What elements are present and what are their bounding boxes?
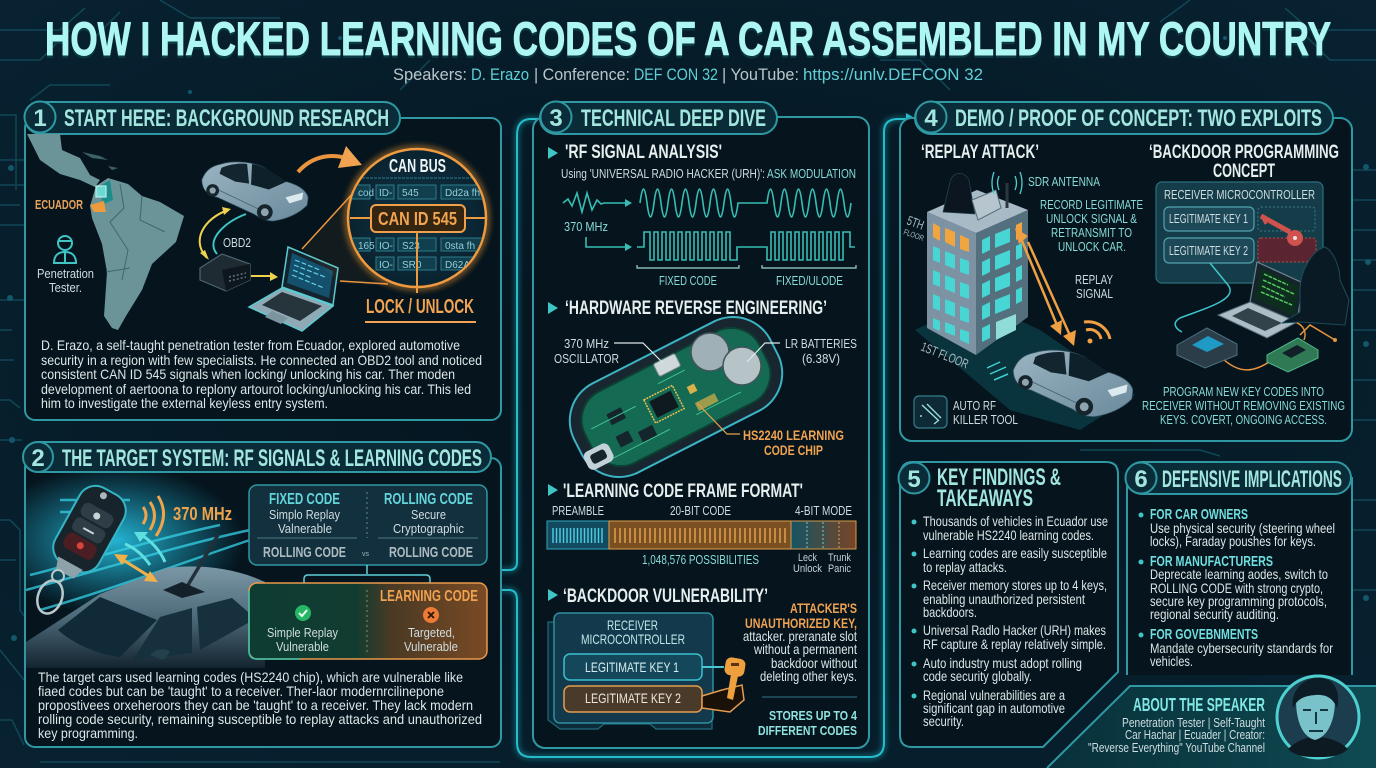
hooded attacker on roof with antenna — [943, 172, 1022, 220]
laptop with terminal — [1218, 262, 1303, 338]
attacker note — [743, 600, 858, 738]
bracket connector — [304, 565, 430, 583]
signal labels: 370 MHz — [564, 219, 608, 234]
cone edge and orange arrow — [298, 146, 388, 284]
replay signal label: REPLAY — [1075, 272, 1113, 287]
magnifier connector cone — [303, 172, 440, 290]
heading 4 — [915, 102, 1333, 134]
receiver diagram in panel 4: LEGITIMATE KEY 2 — [1169, 243, 1248, 258]
receiver diagram in panel 4: LEGITIMATE KEY 1 — [1169, 211, 1248, 226]
record note — [1040, 197, 1143, 254]
hardware reverse engineering heading: ‘HARDWARE REVERSE ENGINEERING’ — [565, 298, 827, 319]
bullet list: Thousands of vehicles in Ecuador use — [923, 513, 1108, 529]
attacker note: UNAUTHORIZED KEY, — [745, 615, 857, 631]
for manufacturers: FOR MANUFACTURERS — [1150, 553, 1273, 570]
bullet list: Auto industry must adopt rolling — [923, 655, 1082, 671]
comparison: learning code: Targeted, — [408, 625, 455, 640]
RF signal analysis heading: 'RF SIGNAL ANALYSIS' — [565, 142, 722, 163]
magnifier: CAN bus detail: D62A — [445, 260, 470, 271]
frame format bar: Trunk — [828, 552, 851, 564]
signal waveform chart — [563, 189, 856, 268]
green circuit device — [1267, 338, 1318, 372]
receiver microcontroller diagram: LEGITIMATE KEY 2 — [585, 690, 681, 706]
comparison: fixed vs rolling code: Cryptographic — [393, 521, 464, 536]
frame format bar: PREAMBLE — [552, 503, 604, 518]
frame format bar: 4-BIT MODE — [795, 503, 852, 518]
floor labels: FLOOR — [902, 227, 925, 243]
receiver diagram in panel 4: RECEIVER MICROCONTROLLER — [1164, 187, 1315, 202]
magnifier: CAN bus detail: 545 — [402, 188, 419, 199]
bullet list: code security globally. — [923, 668, 1032, 684]
replay attack heading: ‘REPLAY ATTACK’ — [921, 142, 1039, 163]
body text 2: rolling code security, remaining susceptible to replay attacks and unauthorized — [38, 711, 482, 727]
car illustration — [202, 162, 308, 221]
comparison: learning code: Vulnerable — [404, 639, 458, 654]
body text 2: key programming. — [38, 725, 138, 741]
callout: oscillator: 370 MHz — [564, 336, 609, 351]
receiver microcontroller diagram: MICROCONTROLLER — [581, 631, 685, 647]
receiver diagram in panel 4 — [1156, 182, 1323, 283]
comparison: fixed vs rolling code: vs — [362, 551, 370, 558]
bullet list: vulnerable HS2240 learning codes. — [923, 527, 1094, 543]
magnifier: CAN bus detail: IO- — [379, 241, 393, 252]
laptop — [249, 247, 338, 331]
magnifier: CAN bus detail — [347, 148, 487, 293]
heading 1: START HERE: BACKGROUND RESEARCH — [64, 105, 389, 132]
panel 1: background research — [24, 102, 501, 420]
speaker portrait — [1277, 676, 1359, 758]
bullet list: backdoors. — [923, 604, 977, 620]
OBD2 arrows and label — [200, 207, 278, 281]
about text: "Reverse Everything" YouTube Channel — [1088, 740, 1265, 755]
RF signal analysis heading — [548, 142, 722, 163]
icon: attacker's key in hand — [702, 656, 746, 712]
for governments: vehicles. — [1150, 653, 1193, 669]
attacker note: without a permanent — [753, 641, 857, 657]
replay arrows — [1015, 228, 1076, 346]
bullet list — [912, 513, 1108, 729]
for manufacturers — [1138, 553, 1328, 622]
connector arrows between panels — [501, 113, 916, 757]
heading 4: 4 — [924, 105, 938, 132]
comparison: learning code: LEARNING CODE — [380, 588, 478, 605]
learning code frame format heading: 'LEARNING CODE FRAME FORMAT' — [563, 481, 803, 502]
motion lines — [987, 362, 1008, 380]
heading 1: 1 — [33, 105, 47, 132]
PCB key fob illustration — [555, 303, 797, 491]
attacker note: DIFFERENT CODES — [758, 723, 857, 738]
callout: HS2240 chip: HS2240 LEARNING — [743, 427, 844, 443]
panel 5: key findings — [898, 462, 1118, 747]
comparison: fixed vs rolling code — [249, 485, 487, 565]
bullet list: significant gap in automotive — [923, 700, 1065, 716]
car in replay attack scene — [1013, 350, 1133, 417]
icon: penetration tester: Tester. — [49, 280, 82, 295]
heading 1 — [24, 102, 400, 134]
signal arrows and antenna — [114, 532, 218, 598]
floor labels: 5TH — [905, 213, 926, 233]
frame format bar: 1,048,576 POSSIBILITIES — [642, 552, 759, 567]
panel 2: the target system — [0, 442, 501, 747]
comparison: fixed vs rolling code: Secure — [411, 507, 446, 522]
SDR antenna label: SDR ANTENNA — [1028, 174, 1100, 189]
body text 2: propostivees orxeheroors they can be 'taught' to a receiver. They lack modern — [38, 697, 473, 713]
hooded hacker — [1282, 247, 1349, 325]
heading 2: 2 — [31, 445, 45, 472]
about text: ABOUT THE SPEAKER — [1133, 695, 1265, 715]
comparison: fixed vs rolling code: FIXED CODE — [269, 491, 340, 508]
radio waves and frequency — [143, 496, 232, 536]
magnifier: CAN bus detail: SR0 — [402, 260, 422, 271]
body text 2: The target cars used learning codes (HS2240 chip), which are vulnerable like — [38, 669, 463, 685]
auto RF killer tool: AUTO RF — [953, 398, 996, 413]
heading 5: TAKEAWAYS — [937, 485, 1033, 512]
callout: batteries: (6.38V) — [802, 351, 840, 366]
record note: UNLOCK SIGNAL & — [1046, 211, 1137, 226]
URH line: ASK MODULATION — [767, 166, 856, 181]
bullet list: enabling unauthorized persistent — [923, 591, 1085, 607]
heading 3: 3 — [549, 105, 563, 132]
callout: batteries — [747, 336, 857, 366]
comparison: fixed vs rolling code: Valnerable — [278, 521, 332, 536]
for manufacturers: Deprecate learning aodes, switch to — [1150, 566, 1328, 582]
comparison: learning code: Simple Replay — [267, 625, 338, 640]
frame format bar: Panic — [828, 563, 851, 575]
bullet list: security. — [923, 713, 964, 729]
body text 1: consistent CAN ID 545 signals when locking/ unlocking his car. Ther moden — [41, 366, 455, 382]
about text: Car Hachar | Ecuader | Creator: — [1125, 727, 1265, 742]
heading 5: 5 — [907, 466, 921, 493]
replay signal label — [1075, 272, 1113, 301]
ground glow under building and car — [915, 300, 1135, 430]
receiver microcontroller diagram — [548, 613, 713, 729]
frame format bar — [547, 503, 856, 575]
bullet list: Regional vulnerabilities are a — [923, 687, 1065, 703]
lock / unlock label: LOCK / UNLOCK — [366, 296, 474, 318]
program keys note — [1142, 384, 1345, 427]
Ecuador label: ECUADOR — [35, 197, 83, 212]
attacker note: attacker. preranate slot — [743, 628, 857, 644]
cable links — [1175, 263, 1335, 370]
panel 6: defensive implications — [1126, 462, 1352, 675]
receiver microcontroller diagram: LEGITIMATE KEY 1 — [585, 659, 679, 675]
attacker note: backdoor without — [771, 655, 857, 671]
bullet list: RF capture & replay relatively simple. — [923, 636, 1106, 652]
heading 5: KEY FINDINGS & — [937, 464, 1061, 491]
subtitle: speakers and conference: https://unlv.DEFCON 32 — [803, 65, 983, 84]
about the speaker banner — [1047, 676, 1376, 768]
car and glow scene — [26, 473, 265, 668]
magnifier: CAN bus detail: CAN BUS — [389, 156, 446, 176]
about text — [1088, 695, 1265, 755]
record note: RETRANSMIT TO — [1051, 225, 1132, 240]
for manufacturers: secure key programming protocols, — [1150, 593, 1327, 609]
for governments: Mandate cybersecurity standards for — [1150, 640, 1333, 656]
attacker note: deleting other keys. — [760, 668, 857, 684]
frame format bar: 20-BIT CODE — [670, 503, 731, 518]
subtitle: speakers and conference: | YouTube: — [722, 65, 799, 84]
for car owners: FOR CAR OWNERS — [1150, 506, 1248, 523]
floor labels — [902, 213, 971, 372]
comparison: fixed vs rolling code: Simplo Replay — [269, 507, 340, 522]
icon: car key fob — [33, 479, 132, 617]
bullet list: Receiver memory stores up to 4 keys, — [923, 577, 1107, 593]
radio waves and frequency: 370 MHz — [173, 504, 232, 524]
magnifier: CAN bus detail: S23 — [402, 241, 420, 252]
cable dot — [1333, 338, 1337, 342]
for car owners — [1138, 506, 1335, 549]
heading 2: THE TARGET SYSTEM: RF SIGNALS & LEARNING CODES — [62, 445, 482, 472]
icon: red rogue key — [1261, 216, 1303, 246]
comparison: learning code — [249, 583, 487, 659]
signal labels: FIXED/ULODE — [776, 273, 843, 288]
attacker note: STORES UP TO 4 — [769, 708, 858, 723]
magnifier: CAN bus detail: CAN ID 545 — [378, 209, 457, 229]
comparison: fixed vs rolling code: ROLLING CODE — [384, 491, 473, 508]
record note: RECORD LEGITIMATE — [1040, 197, 1143, 212]
lock / unlock label — [365, 296, 476, 322]
backdoor programming heading: CONCEPT — [1213, 161, 1275, 182]
callout: batteries: LR BATTERIES — [785, 336, 857, 351]
wifi signal icon — [1084, 322, 1110, 344]
subtitle: speakers and conference: Speakers: — [393, 65, 467, 84]
for manufacturers: regional security auditing. — [1150, 606, 1279, 622]
subtitle: speakers and conference: DEF CON 32 — [634, 65, 718, 84]
heading 3: TECHNICAL DEEP DIVE — [581, 105, 766, 132]
backdoor programming heading — [1149, 142, 1339, 182]
comparison: learning code: Vulnerable — [276, 639, 329, 654]
building illustration — [927, 190, 1028, 355]
URH line: Using 'UNIVERSAL RADIO HACKER (URH)': — [561, 166, 765, 181]
magnifier: CAN bus detail: cod — [358, 188, 374, 199]
subtitle: speakers and conference: | Conference: — [534, 65, 630, 84]
for car owners: locks), Faraday poushes for keys. — [1150, 533, 1316, 549]
bullet list: to replay attacks. — [923, 559, 1007, 575]
magnifier: CAN bus detail: 165 — [358, 241, 375, 252]
icon: penetration tester — [37, 236, 94, 295]
heading 5 — [898, 462, 1061, 512]
about text: Penetration Tester | Self-Taught — [1122, 715, 1265, 730]
frame format bar: Leck — [798, 552, 817, 564]
for governments: FOR GOVEBNMENTS — [1150, 626, 1258, 643]
magnifier: CAN bus detail: Dd2a fh — [445, 188, 480, 199]
map of the Americas — [27, 134, 184, 330]
icon: penetration tester: Penetration — [37, 266, 94, 281]
frame format bar: Unlock — [793, 563, 822, 575]
body text 1: development of aertoona to replony artourot locking/unlocking his car. This led — [41, 381, 471, 397]
heading 6: 6 — [1134, 466, 1148, 493]
backdoor vulnerability heading — [548, 586, 768, 607]
backdoor vulnerability heading: ‘BACKDOOR VULNERABILITY’ — [563, 586, 768, 607]
heading 6 — [1126, 462, 1351, 494]
magnifier: CAN bus detail: 0sta fh — [445, 241, 475, 252]
body text 1: D. Erazo, a self-taught penetration tester from Ecuador, explored automotive — [41, 337, 460, 353]
auto RF killer tool — [914, 396, 1018, 428]
floor labels: 1ST FLOOR — [919, 339, 971, 372]
OBD2 connector — [200, 254, 250, 291]
panel 4: demo / proof of concept — [900, 102, 1352, 441]
magnifier: CAN bus detail: ID- — [379, 188, 392, 199]
replay signal label: SIGNAL — [1076, 286, 1113, 301]
OBD2 arrows and label: OBD2 — [223, 235, 251, 250]
panel 3: technical deep dive — [533, 102, 869, 748]
body text 1: security in a region with few specialists. He connected an OBD2 tool and noticed — [41, 352, 482, 368]
auto RF killer tool: KILLER TOOL — [953, 412, 1018, 427]
body text 1 — [41, 337, 482, 411]
record note: UNLOCK CAR. — [1058, 239, 1126, 254]
bullet list: Universal Radlo Hacker (URH) makes — [923, 622, 1106, 638]
body text 2 — [38, 669, 482, 741]
callout: HS2240 chip: CODE CHIP — [764, 442, 823, 458]
comparison: fixed vs rolling code: ROLLING CODE — [263, 544, 346, 561]
receiver microcontroller diagram: RECEIVER — [607, 617, 658, 633]
attacker note: ATTACKER'S — [790, 600, 857, 616]
subtitle: speakers and conference: D. Erazo — [471, 65, 529, 84]
heading 2 — [23, 442, 491, 472]
bullet list: Learning codes are easily susceptible — [923, 545, 1107, 561]
for car owners: Use physical security (steering wheel — [1150, 520, 1335, 536]
heading 3 — [540, 102, 777, 134]
magnifier: CAN bus detail: IO- — [379, 260, 393, 271]
body text 1: him to investigate the external keyless entry system. — [41, 395, 328, 411]
signal labels: FIXED CODE — [659, 273, 717, 288]
for manufacturers: ROLLING CODE with strong crypto, — [1150, 580, 1323, 596]
router device — [1177, 328, 1237, 368]
callout: oscillator — [554, 336, 663, 366]
body text 2: fiaed codes but can be 'taught' to a receiver. Ther-laor modernrcilinepone — [38, 683, 444, 699]
signal labels — [564, 219, 843, 288]
comparison: fixed vs rolling code: ROLLING CODE — [389, 544, 473, 561]
for governments — [1138, 626, 1333, 669]
program keys note: PROGRAM NEW KEY CODES INTO — [1163, 384, 1324, 399]
callout: HS2240 chip — [697, 403, 844, 458]
callout: oscillator: OSCILLATOR — [554, 351, 619, 366]
subtitle: speakers and conference — [393, 65, 983, 84]
